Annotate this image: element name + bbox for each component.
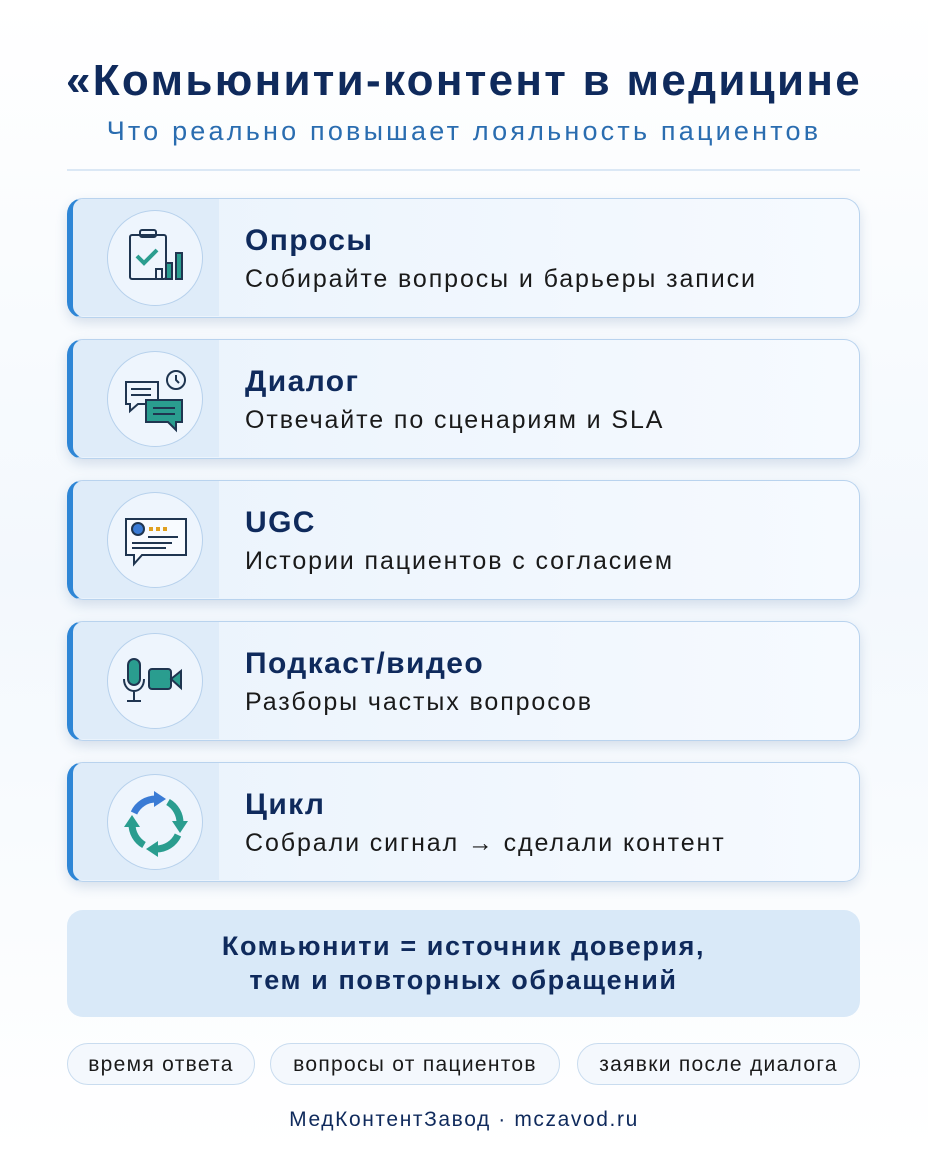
title: «Комьюнити-контент в медицине [66, 56, 862, 105]
icon: review card [107, 492, 203, 588]
subtitle: Что реально повышает лояльность пациентов [107, 116, 821, 146]
card: Цикл [67, 762, 860, 882]
icon: mic and camera [107, 633, 203, 729]
callout: summary: Комьюнити = источник доверия, [222, 931, 705, 961]
card: Диалог [67, 339, 860, 459]
pill: время ответа [67, 1043, 255, 1085]
callout: summary [67, 910, 860, 1017]
pill: время ответа: время ответа [88, 1053, 234, 1076]
heading: Диалог [245, 365, 359, 398]
card: Опросы [67, 198, 860, 318]
pill: заявки после диалога [577, 1043, 860, 1085]
card: Подкаст/видео [67, 621, 860, 741]
heading: Цикл [245, 788, 325, 821]
pill: вопросы от пациентов: вопросы от пациентов [293, 1053, 537, 1076]
icon: chat bubbles [107, 351, 203, 447]
pill: вопросы от пациентов [270, 1043, 560, 1085]
callout: summary: тем и повторных обращений [249, 965, 678, 995]
text: Истории пациентов с согласием [245, 547, 674, 575]
card: UGC [67, 480, 860, 600]
icon: clipboard chart [107, 210, 203, 306]
text: Отвечайте по сценариям и SLA [245, 406, 664, 434]
text: Собрали сигнал → сделали контент [245, 829, 726, 857]
text: Разборы частых вопросов [245, 688, 593, 716]
icon: cycle arrows [107, 774, 203, 870]
heading: Подкаст/видео [245, 647, 484, 680]
footer: МедКонтентЗавод · mczavod.ru [289, 1108, 639, 1131]
text: Собирайте вопросы и барьеры записи [245, 265, 757, 293]
heading: UGC [245, 506, 316, 539]
heading: Опросы [245, 224, 373, 257]
pill: заявки после диалога: заявки после диалога [599, 1053, 838, 1076]
